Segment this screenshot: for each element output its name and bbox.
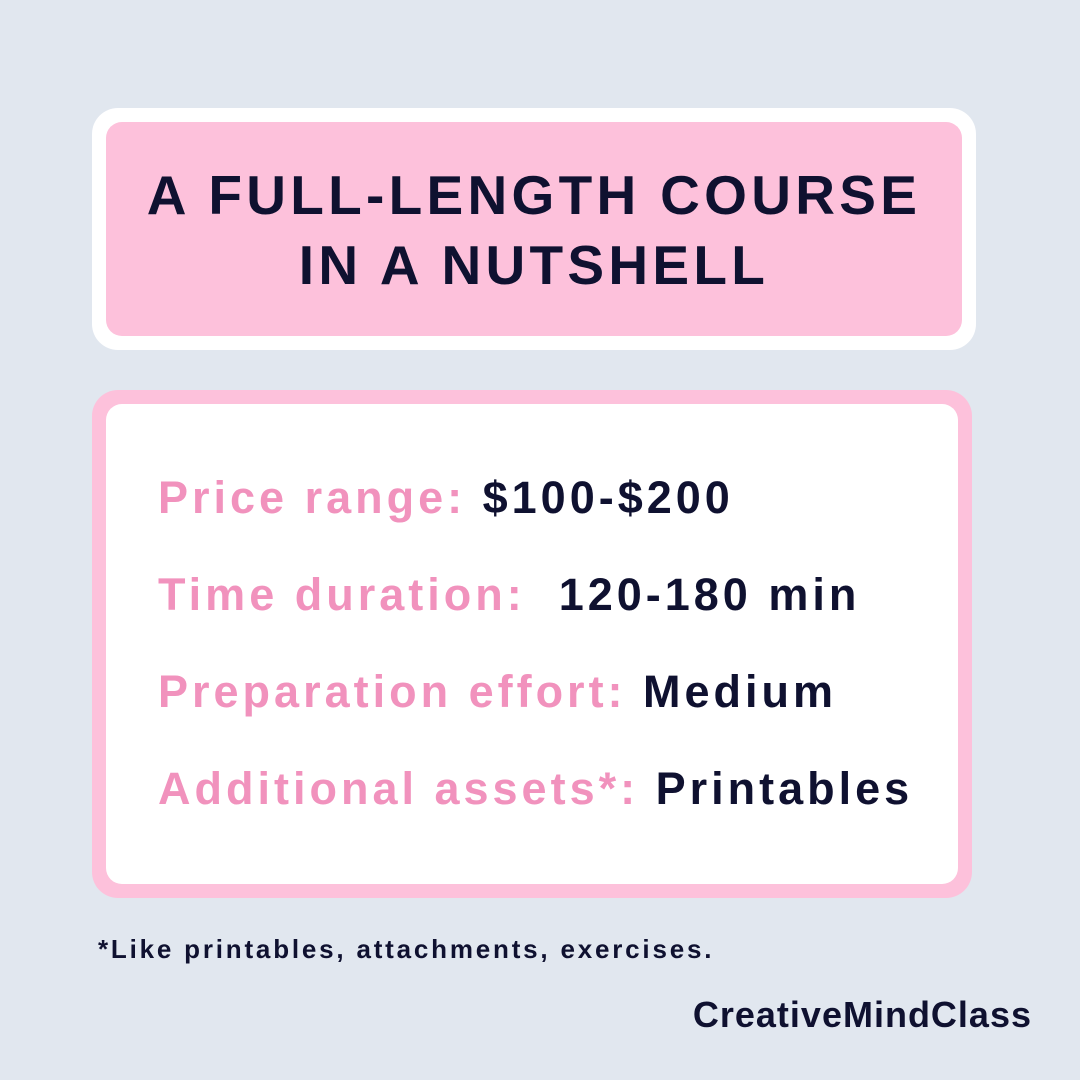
footnote: *Like printables, attachments, exercises. <box>98 934 714 964</box>
row: assets: Additional assets*: Printables <box>158 763 913 814</box>
panel: details <box>92 390 972 898</box>
brand: CreativeMindClass <box>693 994 1032 1035</box>
title box <box>106 122 962 336</box>
row: effort: Preparation effort: Medium <box>158 666 837 717</box>
row: price: Price range: $100-$200 <box>158 472 734 523</box>
inner white box <box>106 404 958 884</box>
title <box>147 164 921 296</box>
title: A FULL-LENGTH COURSE <box>147 164 921 226</box>
panel: title <box>92 108 976 350</box>
row: time: Time duration: 120-180 min <box>158 569 860 620</box>
title: IN A NUTSHELL <box>299 234 769 296</box>
